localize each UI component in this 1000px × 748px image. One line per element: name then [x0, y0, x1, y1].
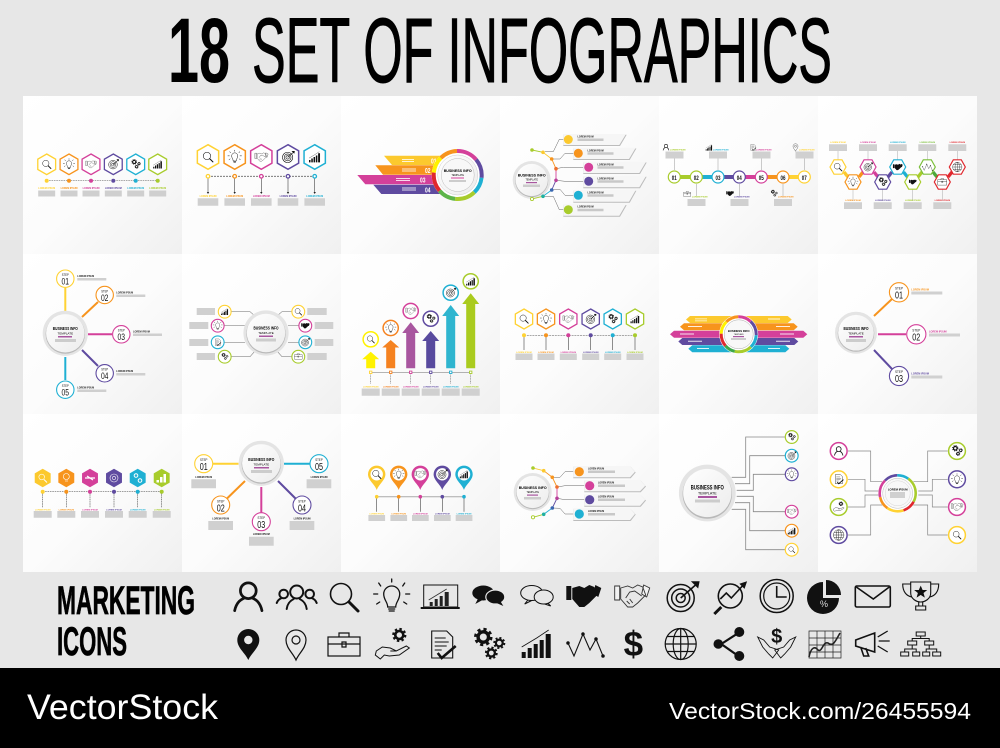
cards: LOREM IPSUM: [588, 468, 604, 470]
step labels: [77, 275, 162, 392]
step text blocks: LOREM IPSUM: [253, 533, 270, 536]
icon: document check: [432, 631, 456, 658]
step circles: STEP: [895, 370, 904, 374]
text blocks: LOREM IPSUM: [369, 514, 384, 516]
central disc: TEMPLATE: [848, 331, 864, 335]
heading: marketing icons: MARKETING: [57, 579, 195, 623]
panel: four cards on arc: [514, 466, 646, 521]
cards: LOREM IPSUM: [598, 496, 614, 498]
connecting lines and text blocks: LOREM IPSUM: [905, 200, 921, 202]
central circle with colour ring: BUSINESS INFO: [444, 169, 472, 173]
icon row two: [237, 625, 941, 664]
central disc: [513, 161, 551, 199]
connecting lines and text blocks: LOREM IPSUM: [830, 142, 846, 144]
icon: share: [714, 627, 744, 661]
icon: laptop chart: [421, 585, 460, 609]
text blocks: LOREM IPSUM: [130, 510, 146, 512]
timeline with arrows: [370, 371, 472, 384]
cards: LOREM IPSUM: [598, 482, 614, 484]
map pins: [368, 466, 473, 490]
text blocks: LOREM IPSUM: [435, 514, 450, 516]
icon: pie chart: [807, 580, 841, 614]
text blocks: LOREM IPSUM: [38, 187, 55, 190]
step circles: [57, 270, 130, 398]
central circle with colour ring: [432, 149, 484, 201]
step circles: 02: [217, 503, 225, 514]
step circles: 03: [257, 520, 266, 531]
text blocks: LOREM IPSUM: [35, 510, 51, 512]
text blocks: LOREM IPSUM: [605, 352, 621, 354]
coloured spokes: [65, 288, 112, 380]
step circles: 05: [315, 462, 323, 473]
cards: LOREM IPSUM: [598, 164, 614, 166]
panel: three step radial: [835, 283, 960, 386]
text blocks: [198, 195, 325, 206]
step circles: 02: [912, 332, 921, 344]
icon: hands with dollar: [758, 626, 796, 658]
connecting lines and text blocks: LOREM IPSUM: [845, 200, 861, 202]
icon circles: [830, 443, 965, 543]
central disc: BUSINESS INFO: [519, 486, 547, 490]
text blocks and icons: LOREM IPSUM: [734, 196, 750, 198]
step text blocks: [191, 476, 331, 546]
elbow connectors: [848, 451, 948, 535]
panel: six outline hexagon timeline: [38, 154, 167, 196]
icon: handshake filled: [566, 585, 601, 607]
footer bar: [0, 668, 1000, 748]
text blocks: [362, 386, 480, 396]
text blocks: LOREM IPSUM: [423, 386, 439, 388]
icon: analytics magnifier: [714, 582, 746, 614]
step circles: 03: [895, 374, 903, 385]
icon: megaphone: [856, 631, 890, 656]
connecting lines and text blocks: LOREM IPSUM: [920, 142, 935, 144]
text blocks and icons: LOREM IPSUM: [778, 196, 794, 198]
panel: seven step chain: [663, 144, 815, 206]
icon: briefcase: [328, 633, 360, 656]
text blocks: LOREM IPSUM: [105, 187, 122, 190]
ribbons: [670, 316, 807, 352]
central disc: [514, 473, 552, 511]
icon: globe: [665, 628, 696, 660]
text blocks: LOREM IPSUM: [106, 510, 122, 512]
central disc: [239, 441, 284, 486]
step circles: STEP: [101, 368, 109, 372]
icon: org chart: [901, 632, 941, 656]
central disc: BUSINESS INFO: [53, 326, 78, 331]
step circles: 04: [298, 503, 306, 514]
hexagon icons: [38, 154, 167, 175]
text blocks: LOREM IPSUM: [226, 195, 243, 198]
icon circles: [363, 274, 478, 347]
coloured ribbons: 04: [425, 188, 431, 194]
footer image id: VectorStock.com/26455594: [669, 698, 971, 724]
text blocks: LOREM IPSUM: [443, 386, 459, 388]
central disc: BUSINESS INFO: [518, 174, 546, 178]
step circles: 03: [118, 332, 125, 343]
step labels: LOREM IPSUM: [116, 292, 133, 294]
connecting lines and text blocks: [829, 142, 966, 209]
cards: LOREM IPSUM: [578, 136, 594, 138]
icon: search: [330, 584, 358, 611]
icon: chart grid: [809, 631, 841, 658]
step circles: [195, 455, 328, 531]
text blocks: LOREM IPSUM: [61, 187, 77, 190]
step labels: LOREM IPSUM: [911, 372, 929, 376]
icon: zigzag line: [567, 633, 604, 657]
step circles: STEP: [101, 289, 109, 293]
icon: map pin filled: [237, 629, 259, 660]
step circles: STEP: [62, 384, 69, 388]
icon: rising bars: [522, 630, 551, 658]
step labels: LOREM IPSUM: [116, 370, 133, 373]
text blocks: LOREM IPSUM: [463, 386, 479, 388]
icon: mail: [855, 586, 890, 607]
panel: six hexagon timeline with arrows: [515, 309, 644, 360]
text blocks: LOREM IPSUM: [583, 352, 599, 354]
connecting lines and text blocks: LOREM IPSUM: [875, 200, 891, 202]
cards: LOREM IPSUM: [588, 150, 604, 152]
step labels: [911, 288, 960, 378]
text blocks: LOREM IPSUM: [280, 195, 296, 198]
coloured ribbons: 03: [420, 178, 426, 184]
text blocks: LOREM IPSUM: [253, 195, 270, 198]
step circles: 01: [895, 290, 903, 302]
text blocks: LOREM IPSUM: [457, 514, 472, 516]
coloured ribbons: 01: [431, 158, 437, 166]
panel: five step radial right: [43, 270, 162, 398]
numbered nodes: 02: [694, 175, 699, 182]
step circles: STEP: [62, 273, 69, 277]
central disc: TEMPLATE: [525, 178, 538, 182]
timeline with arrows: [41, 490, 164, 508]
panel: five step radial below hub: [191, 441, 331, 546]
text blocks and icons: LOREM IPSUM: [713, 150, 729, 152]
central disc: [679, 465, 736, 521]
dotted timeline: [45, 179, 160, 183]
central ring: BUSINESS INFO: [728, 329, 750, 333]
text blocks: LOREM IPSUM: [59, 510, 74, 512]
text blocks: LOREM IPSUM: [403, 386, 419, 388]
icon: person: [235, 583, 262, 611]
text blocks: LOREM IPSUM: [154, 510, 170, 512]
step labels: LOREM IPSUM: [77, 275, 94, 278]
text blocks and icons: [663, 144, 815, 206]
step circles: 05: [62, 388, 69, 398]
panel backgrounds grid: [23, 96, 977, 572]
icon: hand with gear: [375, 629, 409, 659]
icon: dollar: $: [624, 625, 643, 664]
coloured ribbons: 02: [425, 168, 431, 175]
panel: eight node hub: [189, 305, 333, 363]
text blocks: LOREM IPSUM: [306, 195, 323, 198]
text blocks: LOREM IPSUM: [391, 514, 406, 516]
icon: chat filled: [472, 586, 505, 606]
step circles: 01: [62, 276, 69, 288]
central disc: TEMPLATE: [526, 491, 539, 494]
text blocks and icons: LOREM IPSUM: [692, 196, 708, 198]
connecting lines and text blocks: LOREM IPSUM: [935, 200, 950, 202]
text blocks: [34, 510, 171, 518]
connecting lines and text blocks: LOREM IPSUM: [890, 142, 906, 144]
panel: hub with eight icons: [830, 443, 965, 543]
step circles: STEP: [200, 458, 208, 462]
icon: gears: [476, 629, 504, 658]
title: [168, 0, 832, 102]
step labels: LOREM IPSUM: [77, 386, 94, 390]
text blocks: LOREM IPSUM: [538, 352, 554, 354]
step circles: STEP: [315, 458, 323, 462]
step circles: 01: [200, 462, 208, 473]
text blocks: LOREM IPSUM: [363, 386, 379, 388]
panel: double sided ribbons: [670, 315, 807, 354]
step circles: STEP: [912, 328, 921, 332]
text blocks: [516, 352, 644, 360]
panel: five large hexagon timeline: [197, 145, 325, 206]
heading: marketing icons: ICONS: [57, 620, 127, 664]
step circles: STEP: [895, 286, 904, 290]
coloured ribbons: [357, 156, 445, 194]
panel: ribbons with circle: [357, 149, 484, 201]
central disc: BUSINESS INFO: [691, 486, 724, 492]
icon: chat outline: [521, 586, 553, 606]
text blocks: LOREM IPSUM: [83, 187, 99, 190]
step circles: STEP: [217, 499, 225, 503]
connector lines: [674, 158, 804, 196]
central disc: [835, 312, 877, 354]
icon: light bulb: [374, 579, 410, 611]
connector lines: [224, 312, 299, 357]
central ring: LOREM IPSUM: [888, 488, 908, 492]
panel: tree diagram: [679, 431, 798, 556]
coloured arc: [530, 139, 583, 210]
numbered nodes: 07: [802, 175, 807, 182]
text blocks: LOREM IPSUM: [82, 510, 98, 512]
rising arrows: [362, 293, 479, 368]
central disc: TEMPLATE: [698, 492, 717, 496]
central ring: TEMPLATE: [734, 333, 744, 336]
hexagon icons: [515, 309, 644, 329]
icon circles: [785, 431, 798, 556]
coloured chain: [674, 175, 804, 179]
step labels: LOREM IPSUM: [911, 288, 929, 292]
text blocks: [368, 514, 472, 521]
step text blocks: LOREM IPSUM: [294, 518, 310, 520]
text blocks: LOREM IPSUM: [200, 195, 216, 198]
step text blocks: LOREM IPSUM: [212, 518, 229, 520]
text blocks: [38, 187, 166, 196]
text blocks: LOREM IPSUM: [516, 352, 532, 354]
cards: LOREM IPSUM: [588, 511, 604, 513]
text blocks and icons: LOREM IPSUM: [670, 150, 686, 152]
central disc: [243, 310, 289, 356]
connecting lines and text blocks: LOREM IPSUM: [950, 142, 965, 144]
central disc: BUSINESS INFO: [254, 326, 279, 330]
icon: map pin outline: [286, 630, 306, 660]
cards: LOREM IPSUM: [578, 207, 594, 209]
icon row one: [235, 579, 939, 614]
text blocks: LOREM IPSUM: [413, 514, 428, 516]
step circles: STEP: [118, 329, 125, 333]
central disc: TEMPLATE: [57, 332, 73, 336]
step circles: STEP: [258, 516, 266, 520]
filled hexagons: [35, 469, 170, 487]
timeline with arrows: [522, 333, 637, 350]
numbered nodes: [668, 171, 810, 183]
step text blocks: LOREM IPSUM: [195, 476, 212, 479]
text blocks: LOREM IPSUM: [383, 386, 399, 388]
text blocks: LOREM IPSUM: [561, 352, 576, 354]
panel: map pin timeline: [368, 466, 473, 521]
icon circles: [211, 305, 312, 363]
hexagon nodes: [830, 160, 965, 189]
spokes: [874, 299, 906, 369]
elbow connectors: [732, 437, 785, 550]
numbered nodes: 04: [737, 175, 742, 182]
text blocks: [189, 308, 333, 360]
cards: [563, 134, 647, 217]
text blocks: LOREM IPSUM: [127, 187, 144, 190]
heading: marketing icons: [57, 579, 195, 664]
step circles: [889, 283, 926, 386]
cards: [573, 466, 646, 521]
coloured arc: [531, 466, 585, 519]
step labels: LOREM IPSUM: [929, 330, 947, 334]
panel: filled hexagon timeline: [34, 469, 171, 518]
central circle with colour ring: TEMPLATE: [451, 174, 464, 177]
panel: six cards on arc: [513, 134, 647, 217]
central disc: TEMPLATE: [253, 462, 269, 466]
numbered nodes: 05: [759, 175, 764, 182]
central disc: BUSINESS INFO: [844, 326, 869, 331]
numbered nodes: 03: [716, 175, 721, 182]
step circles: 04: [101, 371, 108, 382]
step labels: LOREM IPSUM: [133, 330, 150, 334]
cards: LOREM IPSUM: [598, 178, 614, 180]
text blocks and icons: LOREM IPSUM: [756, 150, 772, 152]
text blocks: LOREM IPSUM: [627, 352, 643, 354]
icon: handshake outline: [615, 585, 650, 607]
step text blocks: LOREM IPSUM: [311, 476, 327, 479]
numbered nodes: 01: [672, 175, 677, 182]
icon: clock: [760, 580, 793, 612]
hexagon icons: [197, 145, 325, 169]
central disc: [43, 311, 88, 356]
timeline with arrows: [375, 495, 466, 512]
footer logo text: VectorStock: [27, 688, 219, 727]
timeline with down arrows: [206, 174, 317, 194]
icon: group: [277, 586, 317, 609]
step circles: 02: [101, 293, 108, 304]
panel: rising arrow chart: [362, 274, 480, 396]
title: 18: [168, 0, 230, 102]
central disc: BUSINESS INFO: [248, 457, 275, 462]
spokes: [213, 464, 310, 512]
step circles: STEP: [298, 499, 306, 503]
numbered nodes: 06: [780, 175, 786, 182]
icon: target: [667, 582, 699, 612]
text blocks and icons: LOREM IPSUM: [799, 150, 815, 152]
panel: zigzag hexagons: [829, 142, 966, 209]
icon: trophy: [903, 582, 939, 610]
text blocks: LOREM IPSUM: [149, 187, 166, 190]
central ring: [719, 315, 758, 354]
cards: LOREM IPSUM: [588, 192, 604, 194]
connecting lines and text blocks: LOREM IPSUM: [860, 142, 876, 144]
central disc: TEMPLATE: [258, 331, 274, 335]
zigzag connectors: [844, 172, 952, 177]
